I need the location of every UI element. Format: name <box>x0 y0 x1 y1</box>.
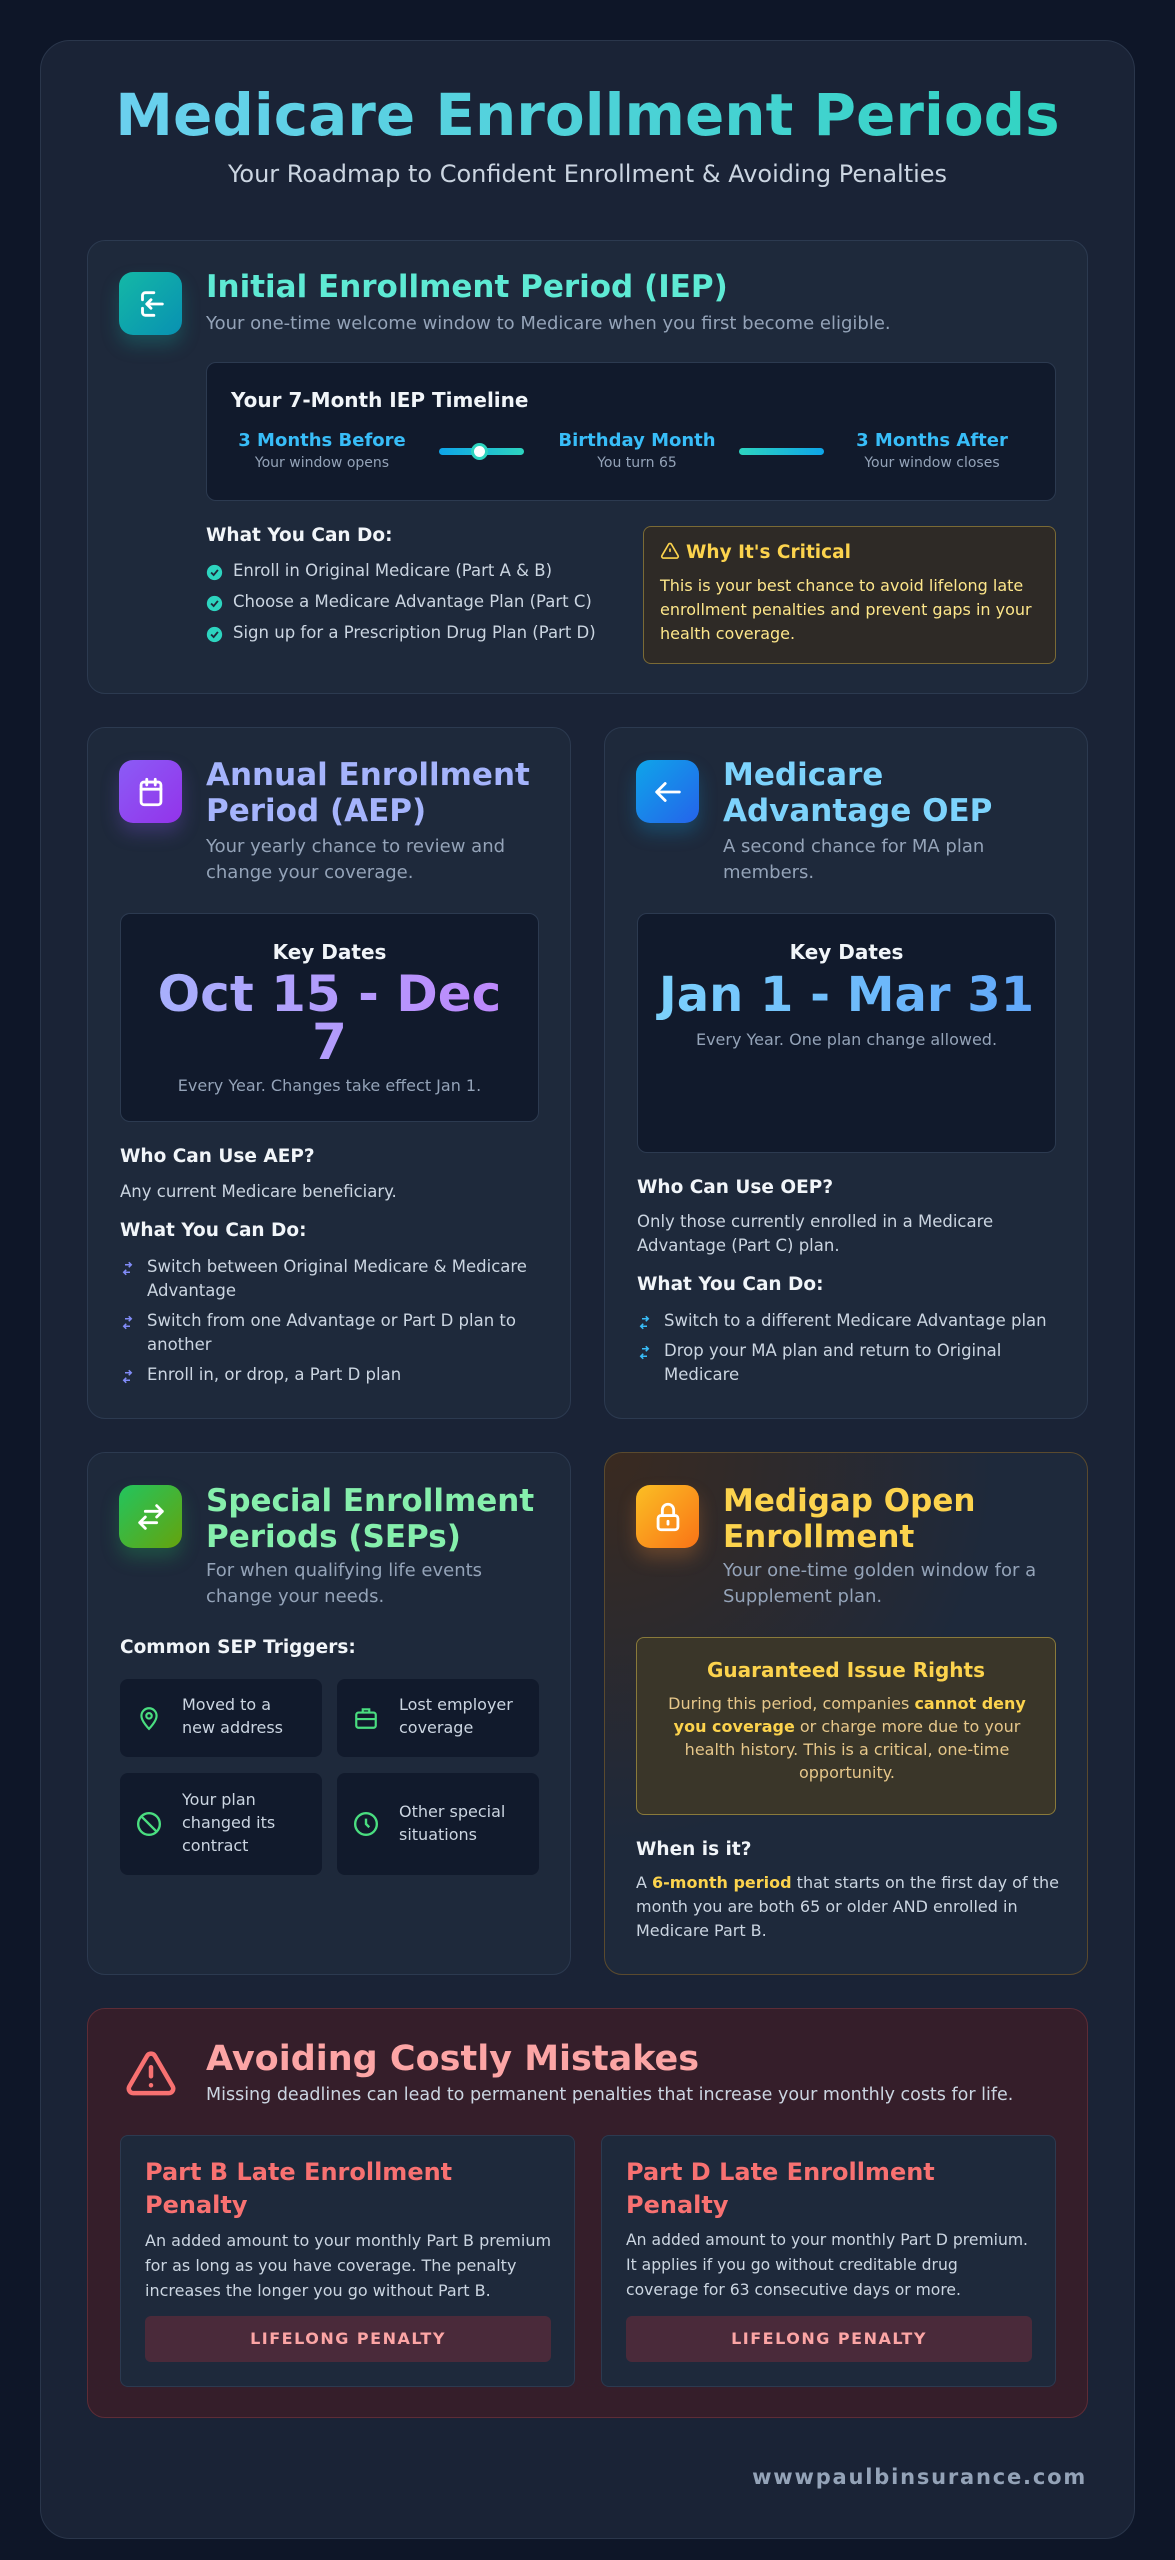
icon: arrow left <box>636 760 699 823</box>
list: AEP actions: Enroll in, or drop, a Part D plan <box>147 1365 401 1384</box>
trigger: lost coverage <box>337 1679 539 1757</box>
icon: lock <box>636 1485 699 1548</box>
heading: Medigap Open <box>723 1483 975 1519</box>
heading: Annual Enrollment <box>206 757 530 793</box>
key dates: Oct 15 - Dec <box>158 965 501 1023</box>
panel: SEP: Common SEP Triggers: <box>120 1637 356 1658</box>
penalty: Part D: An added amount to your monthly Part D premium. It applies if you go without creditable drug coverage for 63 consecutive days or more. <box>626 2231 1028 2299</box>
heading <box>206 1483 534 1555</box>
key dates: Every Year. One plan change allowed. <box>696 1030 997 1049</box>
trigger: other: Other special <box>399 1802 505 1821</box>
penalty: Part D: Part D Late Enrollment Penalty <box>626 2158 935 2219</box>
penalty: Part B: Part B Late Enrollment Penalty <box>145 2158 452 2219</box>
penalty: Part D: LIFELONG PENALTY <box>731 2329 927 2348</box>
trigger: lost coverage: coverage <box>399 1718 473 1737</box>
penalty: Part B: An added amount to your monthly Part B premium for as long as you have coverage. The penalty increases the longer you go without Part B. <box>145 2231 551 2300</box>
heading <box>206 757 530 829</box>
key dates <box>637 913 1056 1153</box>
panel: AEP <box>87 727 571 1419</box>
heading: Period (AEP) <box>206 793 426 829</box>
list: OEP actions: Switch to a different Medicare Advantage plan <box>664 1311 1047 1330</box>
panel: Medigap <box>604 1452 1088 1975</box>
panel: MA OEP: What You Can Do: <box>637 1274 824 1295</box>
callout: guaranteed issue: Guaranteed Issue Rights <box>707 1658 985 1682</box>
heading: Special Enrollment <box>206 1483 534 1519</box>
trigger: lost coverage: Lost employer <box>399 1695 513 1714</box>
list: AEP actions: Switch between Original Medicare & Medicare Advantage <box>147 1257 527 1300</box>
who can use: Who Can Use OEP? <box>637 1177 833 1198</box>
who can use: Who Can Use AEP? <box>120 1146 315 1167</box>
callout: why critical <box>643 526 1056 664</box>
icon: warning <box>126 2051 176 2096</box>
penalty: Part B <box>120 2135 575 2387</box>
description: Your one-time welcome window to Medicare when you first become eligible. <box>206 313 891 334</box>
trigger: moved: new address <box>182 1718 283 1737</box>
key dates: 7 <box>312 1013 347 1071</box>
trigger: other <box>337 1773 539 1875</box>
timeline box: 3 Months Before <box>238 430 406 451</box>
heading: Periods (SEPs) <box>206 1519 461 1555</box>
panel: MA OEP <box>604 727 1088 1419</box>
description: Your yearly chance to review and change your coverage. <box>206 836 505 883</box>
timeline box: You turn 65 <box>597 455 677 471</box>
list: AEP actions: Switch from one Advantage or Part D plan to another <box>147 1311 516 1354</box>
penalty: Part B: LIFELONG PENALTY <box>250 2329 446 2348</box>
what you can do: What You Can Do: <box>206 525 392 546</box>
timeline box <box>206 362 1056 501</box>
callout: why critical: Why It's Critical <box>686 542 851 563</box>
list: AEP actions <box>122 1257 527 1384</box>
icon: calendar <box>119 760 182 823</box>
list: OEP actions <box>640 1311 1047 1384</box>
key dates <box>120 913 539 1122</box>
icon: swap <box>119 1485 182 1548</box>
list: IEP actions <box>206 561 596 642</box>
trigger: plan changed <box>120 1773 322 1875</box>
list: IEP actions: Enroll in Original Medicare (Part A & B) <box>233 561 552 580</box>
heading: Enrollment <box>723 1519 914 1555</box>
panel: SEP <box>87 1452 571 1975</box>
title: Medicare Enrollment Periods <box>115 81 1060 149</box>
heading <box>723 757 992 829</box>
heading: Initial Enrollment Period (IEP) <box>206 269 728 305</box>
callout: guaranteed issue <box>636 1637 1056 1815</box>
trigger: other: situations <box>399 1825 477 1844</box>
penalty: Part D <box>601 2135 1056 2387</box>
trigger: plan changed: Your plan <box>182 1790 256 1809</box>
panel: mistakes <box>87 2008 1088 2418</box>
panel: Medigap: A 6-month period that starts on the first day of the month you are both 65 or older AND enrolled in Medicare Part B. <box>636 1873 1059 1940</box>
key dates: Key Dates <box>273 940 386 964</box>
triggers grid <box>120 1679 539 1875</box>
description: Your one-time golden window for a Supplement plan. <box>723 1560 1036 1607</box>
panel: MA OEP: Only those currently enrolled in a Medicare Advantage (Part C) plan. <box>637 1212 993 1255</box>
key dates: Key Dates <box>790 940 903 964</box>
heading: Medicare <box>723 757 883 793</box>
description: A second chance for MA plan members. <box>723 836 984 883</box>
description: Missing deadlines can lead to permanent penalties that increase your monthly costs for life. <box>206 2085 1013 2105</box>
callout: why critical: This is your best chance to avoid lifelong late enrollment penalties and prevent gaps in your health coverage. <box>660 576 1032 643</box>
callout: guaranteed issue: During this period, companies cannot deny you coverage or charge more due to your health history. This is a critical, one-time opportunity. <box>668 1694 1026 1782</box>
list: IEP actions: Choose a Medicare Advantage Plan (Part C) <box>233 592 592 611</box>
panel: IEP <box>87 240 1088 694</box>
key dates: Every Year. Changes take effect Jan 1. <box>178 1076 481 1095</box>
footer: wwwpaulbinsurance.com <box>752 2465 1087 2489</box>
icon: enter <box>119 272 182 335</box>
heading: Advantage OEP <box>723 793 992 829</box>
trigger: plan changed: contract <box>182 1836 248 1855</box>
list: IEP actions: Sign up for a Prescription Drug Plan (Part D) <box>233 623 596 642</box>
description: For when qualifying life events change your needs. <box>206 1560 482 1607</box>
panel: AEP: Any current Medicare beneficiary. <box>120 1182 397 1201</box>
list: OEP actions: Drop your MA plan and return to Original Medicare <box>664 1341 1001 1384</box>
timeline box: 3 Months After <box>856 430 1008 451</box>
timeline box: Your window opens <box>255 455 389 471</box>
trigger: moved: Moved to a <box>182 1695 271 1714</box>
key dates: Jan 1 - Mar 31 <box>659 967 1034 1023</box>
timeline box: Your window closes <box>864 455 1000 471</box>
timeline box: Birthday Month <box>558 430 716 451</box>
trigger: moved <box>120 1679 322 1757</box>
panel: Medigap: When is it? <box>636 1839 751 1860</box>
panel: AEP: What You Can Do: <box>120 1220 306 1241</box>
trigger: plan changed: changed its <box>182 1813 275 1832</box>
timeline box: Your 7-Month IEP Timeline <box>231 388 528 412</box>
heading <box>723 1483 975 1555</box>
subtitle: Your Roadmap to Confident Enrollment & Avoiding Penalties <box>228 160 947 188</box>
heading: Avoiding Costly Mistakes <box>206 2039 699 2079</box>
